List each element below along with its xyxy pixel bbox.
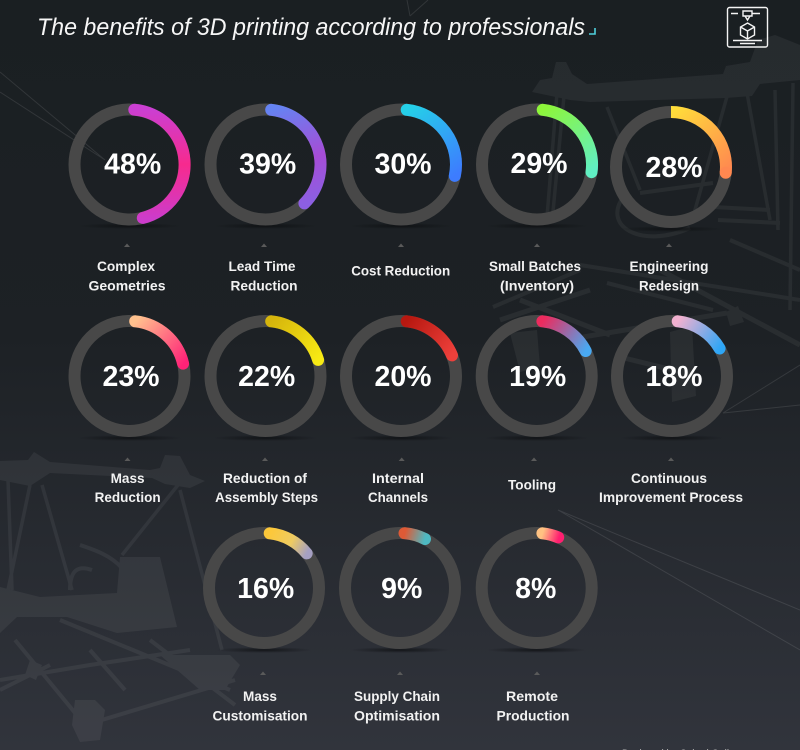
ring: 39% Lead Time Reduction: Lead Time xyxy=(228,258,296,274)
ring: 23% Mass Reduction: Mass xyxy=(111,470,145,486)
ring: 30% Cost Reduction: Cost Reduction xyxy=(351,262,450,278)
ring: 19% Tooling: Tooling xyxy=(508,476,556,492)
ring: 29% Small Batches (Inventory): 29% xyxy=(510,148,568,180)
background: printer silhouette top right xyxy=(493,35,800,402)
ring: 8% Remote Production: Remote xyxy=(506,688,558,704)
ring: 23% Mass Reduction: 23% xyxy=(102,361,160,393)
ring: 8% Remote Production xyxy=(482,533,592,724)
ring: 18% Continuous Improvement Process: 18% xyxy=(645,361,703,393)
ring: 48% Complex Geometries: Geometries xyxy=(88,278,166,294)
icon: 3D printer xyxy=(728,8,768,47)
ring: 39% Lead Time Reduction: Reduction xyxy=(230,278,298,294)
ring: 8% Remote Production: 8% xyxy=(515,573,556,605)
ring: 23% Mass Reduction xyxy=(74,321,184,505)
ring: 9% Supply Chain Optimisation xyxy=(345,533,455,724)
ring: 28% Engineering Redesign xyxy=(616,112,732,294)
ring: 19% Tooling: 19% xyxy=(509,361,566,393)
ring: 48% Complex Geometries: 48% xyxy=(104,148,161,180)
ring: 22% Reduction of Assembly Steps: 22% xyxy=(238,361,295,393)
ring: 19% Tooling xyxy=(482,321,592,492)
ring: 30% Cost Reduction: 30% xyxy=(374,148,432,180)
ring: 22% Reduction of Assembly Steps xyxy=(210,321,320,505)
background: printer silhouette bottom left xyxy=(0,452,240,742)
ring: 22% Reduction of Assembly Steps: Assembly Steps xyxy=(215,489,318,505)
title corner accent xyxy=(589,28,595,34)
ring: 18% Continuous Improvement Process xyxy=(599,321,743,505)
ring: 22% Reduction of Assembly Steps: Reduction of xyxy=(223,470,307,486)
ring: 29% Small Batches (Inventory): (Inventory) xyxy=(500,278,574,294)
ring: 20% Internal Channels: Internal xyxy=(372,470,424,486)
ring: 16% Mass Customisation: Customisation xyxy=(212,708,308,724)
ring: 9% Supply Chain Optimisation: 9% xyxy=(381,573,422,605)
ring: 23% Mass Reduction: Reduction xyxy=(95,489,161,505)
ring: 20% Internal Channels xyxy=(346,321,456,505)
ring: 9% Supply Chain Optimisation: Supply Chain xyxy=(354,688,440,704)
ring: 39% Lead Time Reduction: 39% xyxy=(239,148,296,180)
ring: 29% Small Batches (Inventory): Small Batches xyxy=(489,258,581,274)
ring: 28% Engineering Redesign: Redesign xyxy=(639,278,699,294)
ring: 29% Small Batches (Inventory) xyxy=(482,110,592,294)
ring: 20% Internal Channels: 20% xyxy=(374,361,432,393)
ring: 16% Mass Customisation xyxy=(209,533,319,724)
ring: 18% Continuous Improvement Process: Improvement Process xyxy=(599,489,743,505)
ring: 16% Mass Customisation: Mass xyxy=(243,688,277,704)
ring: 9% Supply Chain Optimisation: Optimisation xyxy=(354,708,440,724)
ring: 18% Continuous Improvement Process: Continuous xyxy=(631,470,707,486)
ring: 28% Engineering Redesign: Engineering xyxy=(630,258,708,274)
ring: 48% Complex Geometries: Complex xyxy=(97,258,155,274)
ring: 28% Engineering Redesign: 28% xyxy=(645,152,703,184)
ring: 30% Cost Reduction xyxy=(346,110,456,278)
ring: 39% Lead Time Reduction xyxy=(210,110,321,294)
ring: 20% Internal Channels: Channels xyxy=(368,489,428,505)
ring: 8% Remote Production: Production xyxy=(496,708,570,724)
ring: 48% Complex Geometries xyxy=(74,110,185,294)
ring: 16% Mass Customisation: 16% xyxy=(237,573,294,605)
title: The benefits of 3D printing according to professionals xyxy=(37,14,585,41)
